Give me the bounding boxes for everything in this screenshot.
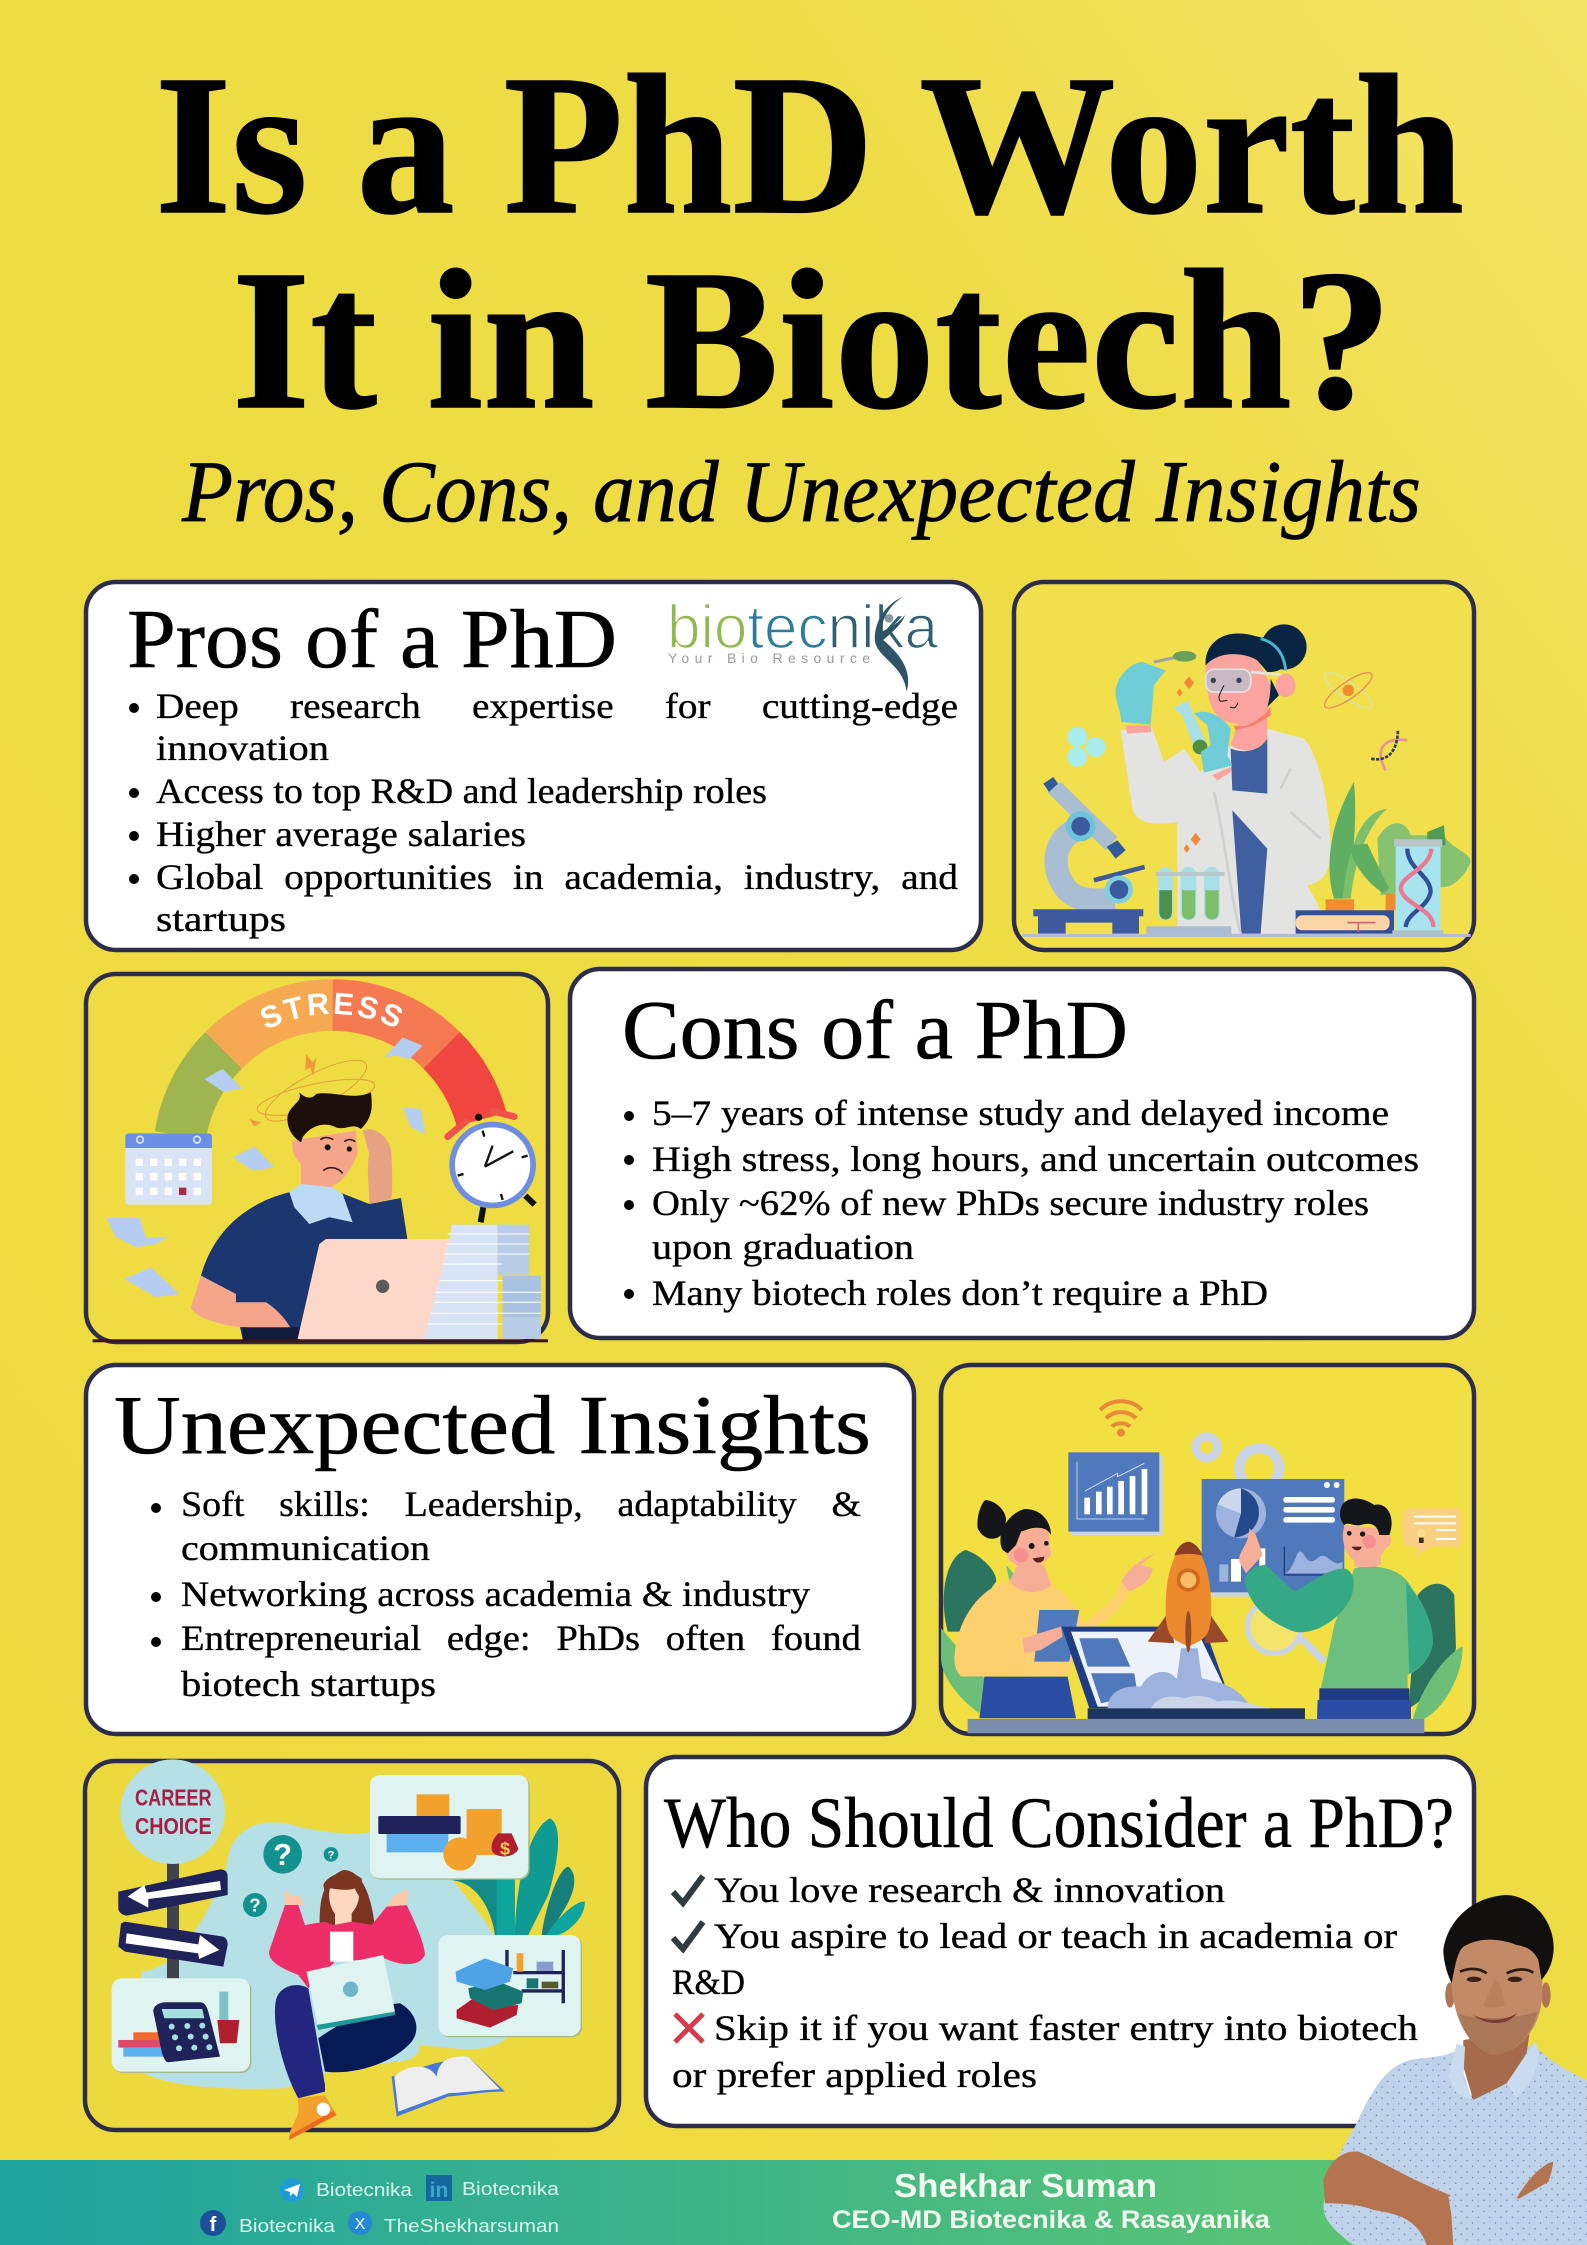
heading: pros: Pros of a PhD xyxy=(127,593,617,686)
author role: CEO-MD Biotecnika & Rasayanika xyxy=(832,2206,1271,2234)
test tubes xyxy=(1146,867,1231,935)
desk xyxy=(968,1719,1424,1733)
icon: linkedin: in xyxy=(430,2179,448,2202)
heading: cons: Cons of a PhD xyxy=(622,984,1128,1077)
shirt xyxy=(1323,2043,1587,2245)
figure: woman with tablet xyxy=(954,1500,1156,1718)
panel: pros xyxy=(86,582,981,950)
insights bullet list: communication xyxy=(181,1528,430,1568)
icon: linkedin xyxy=(426,2175,452,2202)
title: Is a PhD Worth xyxy=(155,35,1464,256)
icon: gears xyxy=(1196,1437,1279,1488)
insights bullet list: biotech startups xyxy=(181,1664,436,1704)
icon: x xyxy=(348,2211,372,2235)
leaves xyxy=(941,1550,1463,1720)
logo: biotecnika xyxy=(667,593,938,692)
pros bullet list: Global opportunities in academia, industry, and xyxy=(156,857,958,897)
title: It in Biotech? xyxy=(232,230,1392,451)
insights bullet list: Entrepreneurial edge: PhDs often found xyxy=(181,1618,861,1658)
icon: cross xyxy=(675,2014,703,2042)
cons bullet list: upon graduation xyxy=(652,1227,914,1267)
icon: idea bubble xyxy=(1403,1508,1461,1557)
panel: who should consider xyxy=(646,1757,1474,2126)
list: who: Skip it if you want faster entry into biotech xyxy=(714,2008,1418,2048)
insights bullet list xyxy=(151,1484,861,1704)
icon: paper stack xyxy=(424,1225,541,1339)
heading: insights: Unexpected Insights xyxy=(114,1379,871,1472)
gauge label: STRESS xyxy=(260,992,402,1028)
hair xyxy=(1443,1895,1554,1983)
dashboard panel xyxy=(1202,1479,1344,1597)
question mark icons: ? xyxy=(328,1849,335,1861)
list: who: You love research & innovation xyxy=(714,1870,1225,1910)
plants xyxy=(1326,782,1471,910)
collar xyxy=(1448,2042,1538,2100)
subtitle: Pros, Cons, and Unexpected Insights xyxy=(181,444,1421,541)
insights bullet list: Networking across academia & industry xyxy=(181,1574,810,1614)
icon: open book xyxy=(392,2056,505,2117)
panel: stress illustration xyxy=(84,972,550,1344)
title xyxy=(155,35,1464,451)
career signpost: CAREER xyxy=(135,1785,212,1811)
card: money: $ xyxy=(500,1838,510,1858)
social links: TheShekharsuman xyxy=(384,2216,559,2236)
icon: x: X xyxy=(355,2216,366,2233)
pros bullet list: Access to top R&D and leadership roles xyxy=(156,771,767,811)
magnifier xyxy=(1248,1600,1324,1662)
chart panel xyxy=(1068,1452,1163,1536)
card: books xyxy=(438,1935,582,2037)
blob background xyxy=(142,1822,512,2089)
cons bullet list: 5–7 years of intense study and delayed income xyxy=(652,1093,1389,1133)
icon: check xyxy=(673,1876,703,1903)
icon: alarm clock xyxy=(448,1111,536,1222)
list: who xyxy=(672,1870,1418,2095)
list: who: R&D xyxy=(672,1962,745,2002)
ears xyxy=(1445,1982,1551,2008)
footer band xyxy=(0,2160,1587,2245)
icon: dna strand xyxy=(1371,730,1407,770)
cons bullet list: High stress, long hours, and uncertain outcomes xyxy=(652,1139,1419,1179)
stress gauge arc xyxy=(180,1005,482,1135)
crossed arms xyxy=(1323,2151,1587,2245)
cons bullet list: Many biotech roles don’t require a PhD xyxy=(652,1273,1268,1313)
pros bullet list: startups xyxy=(156,899,286,939)
social links: Biotecnika xyxy=(462,2179,560,2199)
pros bullet list xyxy=(129,686,958,939)
heading: who: Who Should Consider a PhD? xyxy=(664,1783,1454,1863)
face xyxy=(1451,1930,1542,2055)
icon: microscope xyxy=(1033,777,1145,934)
author name: Shekhar Suman xyxy=(894,2167,1157,2204)
pros bullet list: innovation xyxy=(156,728,329,768)
icon: rocket xyxy=(1108,1542,1271,1708)
figure: man pointing xyxy=(1239,1498,1433,1720)
icon: calendar xyxy=(125,1133,212,1205)
logo: biotecnika: Your Bio Resource xyxy=(668,650,870,666)
cons bullet list xyxy=(624,1093,1419,1313)
question mark icons: ? xyxy=(273,1838,292,1872)
photo: author xyxy=(1323,1895,1587,2245)
figure: woman with laptop xyxy=(269,1870,425,2140)
eyes and mouth xyxy=(1460,1969,1533,2023)
list: who: You aspire to lead or teach in academia or xyxy=(714,1916,1397,1956)
book xyxy=(1296,910,1394,934)
card: calculator xyxy=(112,1978,251,2073)
figure: laptop xyxy=(298,1239,451,1339)
career signpost xyxy=(118,1759,228,1978)
icon: wifi xyxy=(1100,1401,1142,1427)
figure: scientist xyxy=(1121,624,1331,934)
panel: startup illustration xyxy=(941,1365,1474,1734)
icon: molecule xyxy=(1067,727,1106,767)
cons bullet list: Only ~62% of new PhDs secure industry roles xyxy=(652,1183,1369,1223)
icon: facebook: f xyxy=(210,2214,217,2236)
dna jar xyxy=(1392,839,1443,935)
figure: laptop xyxy=(1062,1627,1305,1719)
panel: career choice illustration xyxy=(85,1759,619,2140)
pros bullet list: Higher average salaries xyxy=(156,814,526,854)
insights bullet list: Soft skills: Leadership, adaptability & xyxy=(181,1484,861,1524)
social links: Biotecnika xyxy=(316,2180,413,2200)
figure: stressed man xyxy=(191,1092,419,1340)
panel: scientist illustration xyxy=(1014,582,1474,950)
icon: atom xyxy=(1320,667,1376,713)
plant xyxy=(450,1818,585,1935)
logo: biotecnika: biotecnika xyxy=(667,593,938,661)
pros bullet list: Deep research expertise for cutting-edge xyxy=(156,686,958,726)
glove with tweezers and leaf xyxy=(1116,651,1196,734)
icon: flying papers xyxy=(106,1037,425,1297)
career signpost: CHOICE xyxy=(135,1813,212,1839)
icon: facebook xyxy=(200,2210,226,2236)
question mark icons: ? xyxy=(249,1895,261,1916)
question mark icons xyxy=(243,1835,338,1917)
social links xyxy=(200,2175,560,2236)
stubble xyxy=(1458,2012,1537,2055)
social links: Biotecnika xyxy=(239,2216,336,2236)
panel: unexpected insights xyxy=(86,1365,914,1734)
sparkles xyxy=(1177,676,1201,853)
panel: cons xyxy=(570,969,1474,1338)
flask and glove xyxy=(1173,700,1232,780)
icon: check xyxy=(673,1922,703,1949)
neck xyxy=(1463,2030,1530,2100)
stress swirl and bolts xyxy=(249,1049,377,1132)
card: money xyxy=(370,1775,530,1880)
icon: telegram xyxy=(280,2178,304,2202)
list: who: or prefer applied roles xyxy=(672,2055,1037,2095)
